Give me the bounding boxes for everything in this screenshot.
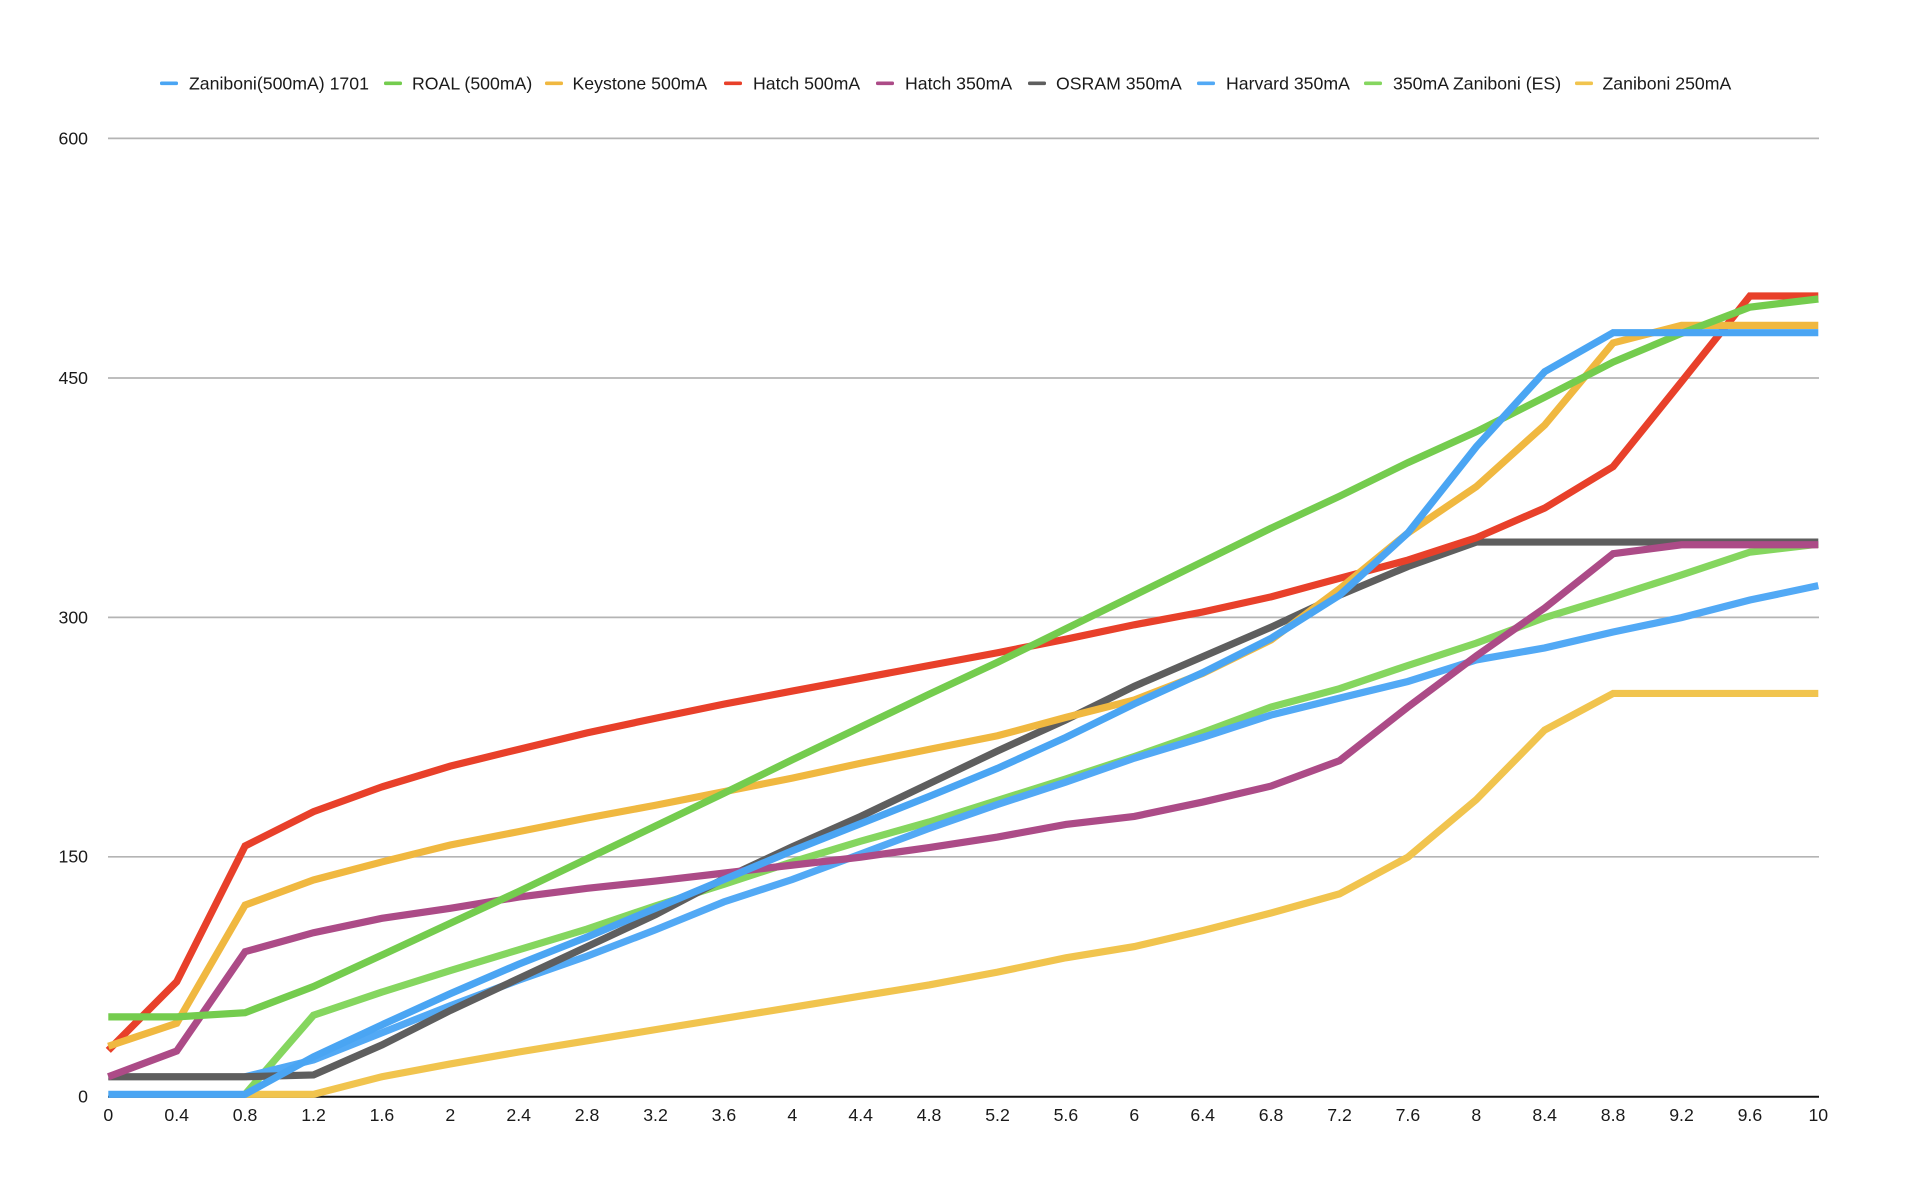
x axis labels: 9.2 <box>1669 1105 1694 1125</box>
legend item: OSRAM 350mA: OSRAM 350mA <box>1056 74 1182 94</box>
x axis labels: 6.8 <box>1259 1105 1284 1125</box>
x axis labels: 3.6 <box>712 1105 736 1125</box>
y axis labels: 0 <box>78 1087 88 1107</box>
x axis labels: 4 <box>787 1105 797 1125</box>
x axis labels: 2.8 <box>575 1105 600 1125</box>
data series <box>108 296 1818 1094</box>
x axis labels: 2.4 <box>506 1105 531 1125</box>
x axis labels: 10 <box>1808 1105 1828 1125</box>
legend item: ROAL (500mA): ROAL (500mA) <box>412 74 532 94</box>
x axis labels: 6.4 <box>1190 1105 1215 1125</box>
x axis labels: 5.6 <box>1054 1105 1078 1125</box>
x axis labels <box>103 1105 1828 1125</box>
series: ROAL (500mA) <box>108 299 1818 1017</box>
x axis labels: 7.2 <box>1327 1105 1352 1125</box>
y axis labels: 600 <box>58 129 88 149</box>
legend <box>160 74 1732 94</box>
series: Zaniboni(500mA) 1701 <box>108 333 1818 1094</box>
series: Zaniboni 250mA <box>245 693 1818 1094</box>
x axis labels: 1.2 <box>301 1105 326 1125</box>
legend item: Harvard 350mA: Harvard 350mA <box>1226 74 1350 94</box>
x axis labels: 8.4 <box>1532 1105 1557 1125</box>
legend item: Zaniboni 250mA: Zaniboni 250mA <box>1602 74 1732 94</box>
x axis labels: 2 <box>445 1105 455 1125</box>
x axis labels: 8.8 <box>1601 1105 1626 1125</box>
x axis labels: 1.6 <box>370 1105 394 1125</box>
x axis labels: 0.8 <box>233 1105 258 1125</box>
x axis labels: 8 <box>1471 1105 1481 1125</box>
legend item: Hatch 350mA: Hatch 350mA <box>905 74 1012 94</box>
x axis labels: 6 <box>1129 1105 1139 1125</box>
x axis labels: 4.8 <box>917 1105 942 1125</box>
series: Keystone 500mA <box>108 325 1818 1046</box>
legend item: Keystone 500mA: Keystone 500mA <box>572 74 707 94</box>
series: Harvard 350mA <box>245 586 1818 1077</box>
x axis labels: 4.4 <box>848 1105 873 1125</box>
x axis labels: 0 <box>103 1105 113 1125</box>
x axis labels: 0.4 <box>164 1105 189 1125</box>
x axis labels: 3.2 <box>643 1105 668 1125</box>
y axis labels: 150 <box>58 847 88 867</box>
x axis labels: 9.6 <box>1738 1105 1762 1125</box>
legend item: 350mA Zaniboni (ES): 350mA Zaniboni (ES) <box>1393 74 1561 94</box>
legend item: Zaniboni(500mA) 1701: Zaniboni(500mA) 1701 <box>189 74 369 94</box>
series: Hatch 350mA <box>108 545 1818 1077</box>
y axis labels <box>58 129 88 1107</box>
x axis labels: 5.2 <box>985 1105 1010 1125</box>
y axis labels: 450 <box>58 368 88 388</box>
series: 350mA Zaniboni (ES) <box>245 544 1818 1094</box>
series: Hatch 500mA <box>108 296 1818 1050</box>
series: OSRAM 350mA <box>108 542 1818 1077</box>
y axis labels: 300 <box>58 607 88 627</box>
x axis labels: 7.6 <box>1396 1105 1420 1125</box>
legend item: Hatch 500mA: Hatch 500mA <box>753 74 860 94</box>
